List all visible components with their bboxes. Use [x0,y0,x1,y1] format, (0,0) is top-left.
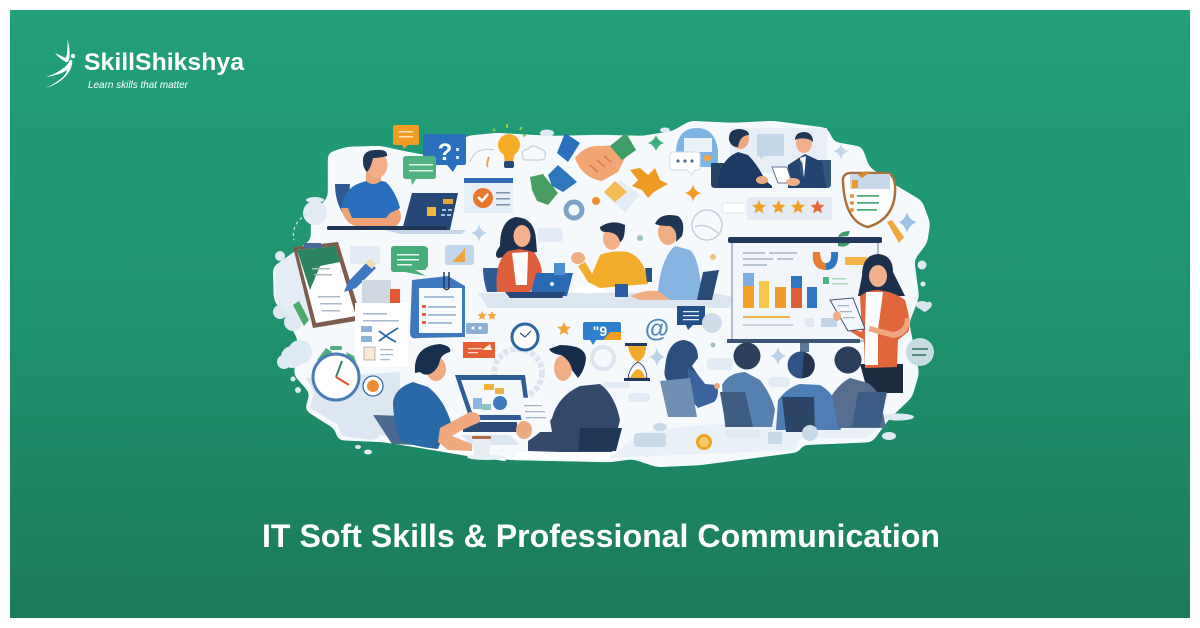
hair [858,254,905,296]
chart bubble [445,245,474,265]
speech bubbles, top [393,125,466,185]
chair [578,428,622,451]
icon: clipboard and pen [293,242,376,328]
icon: blue speech box with digits [583,322,621,345]
star 2 [772,200,786,213]
round blue note [670,128,718,175]
orange bubble [393,125,419,149]
business meeting panel [711,128,831,188]
document on table [772,167,792,183]
hand [516,421,532,439]
viewer 2 [720,342,775,427]
green message bubble [391,246,428,276]
title: IT Soft Skills & Professional Communication [262,518,940,554]
man chair [373,415,417,445]
icon: network outline [692,210,722,240]
woman jacket [496,249,542,292]
icon: dashed arrow and cloud outlines [470,146,545,167]
chair [335,184,350,212]
floating cloud scraps [273,128,928,454]
backrest [645,268,652,282]
white chat bubble [670,152,700,175]
suited man [515,345,622,459]
pale background details [293,180,790,402]
icon: orange puzzle [630,168,668,198]
right chair [697,270,719,300]
woman chair [483,268,498,292]
face [869,265,887,287]
icon: two small stars [477,311,497,320]
woman face [514,225,530,247]
icon: single star [557,322,571,335]
person with laptop, top left [327,150,466,234]
desk strip [515,452,610,459]
blue question bubble: ? [438,139,452,166]
icon: magnifier over checklist [843,171,904,243]
document stack [362,272,465,338]
white report sheet [355,303,408,367]
laptop desk pair [373,344,531,460]
illustration collage [273,121,934,467]
viewer 3 [776,352,841,432]
icon: yellow diamond card [604,181,627,202]
icon: small wall clock [512,324,538,350]
grey round chat badge [906,338,934,366]
green marker [293,301,309,326]
icon: handshake with cards [557,133,636,181]
woman hair [496,217,537,258]
at sign: @ [645,315,669,343]
forearms [341,208,401,226]
screen [732,241,878,341]
icon: blue sparkles by panel [833,143,849,160]
pale blue wash lower left [306,372,400,440]
icon: blue speech box with digits: "9 [593,323,607,339]
document held [517,397,552,432]
lower rail [727,339,860,343]
desk [327,226,447,230]
green bubble [403,156,436,185]
blue polo man [393,382,452,449]
shirt [341,179,400,219]
icon: browser checklist window [464,178,513,213]
green note [823,277,829,284]
icon: stopwatch [313,346,359,400]
speech note [757,134,784,159]
tablet behind laptop [554,263,565,275]
star 4 [810,200,824,213]
paper clip [444,272,449,290]
star 1 [752,200,766,213]
laptop [402,193,458,230]
plate and mug [573,286,603,294]
team table meeting [478,215,732,308]
left businessman [718,152,772,188]
presenter woman [830,254,910,393]
icon: puzzle pieces [530,165,577,205]
woman laptop [530,273,573,296]
top rail [728,237,882,243]
icon: dark blue note bubble [677,306,705,330]
star rating card [722,197,832,220]
tagline: Learn skills that matter [88,79,188,91]
icon: green sparkle [648,135,664,151]
audience seated [660,340,887,432]
small grey bubble [702,313,722,333]
clipboard [293,242,362,328]
desk edge curve [378,434,510,461]
viewer 1 [660,340,720,417]
right businessman [788,154,826,188]
seating block [711,163,736,188]
woman blouse [512,252,528,285]
dashed arc [293,211,312,240]
tablet [830,298,865,331]
head [426,357,446,381]
orange label [845,257,867,265]
arm [438,412,480,451]
icon: orange sparkle [685,184,701,202]
white cloud backdrop [273,121,930,467]
light blue shirt man [657,246,702,300]
arm [868,318,910,338]
soft bubbles, right edge [918,302,932,312]
icon: lightbulb [493,124,526,168]
neck and head [366,170,381,184]
table [478,293,732,308]
green flag [838,231,850,247]
logo [46,39,245,91]
jacket [845,290,909,368]
bars [743,273,817,308]
presentation board [727,231,882,352]
text lines [743,252,797,266]
icon: leaping figure [46,39,75,88]
lower right pale panels [634,423,818,447]
star 3 [791,200,805,213]
laptop screen [455,375,531,420]
icon: blue sparkle [899,212,917,233]
stand [800,343,809,352]
orange mail card [463,342,495,358]
icon: hourglass [624,343,650,381]
viewer 4 [832,346,887,428]
icon: target badge [363,376,383,396]
saucer [467,454,505,460]
pen [344,261,376,292]
icon: gold gear [698,436,710,448]
brand name: SkillShikshya [84,49,245,76]
pale sparkles [471,197,786,367]
coffee cup [472,437,491,456]
baseline [743,316,790,318]
yellow shirt man [578,251,648,288]
keyboard [463,422,517,432]
blouse [865,292,883,365]
wall panel [730,128,827,173]
arc chart [813,252,826,270]
pants [860,364,903,393]
icon: gear [566,202,582,218]
blue chat chip [466,323,488,334]
